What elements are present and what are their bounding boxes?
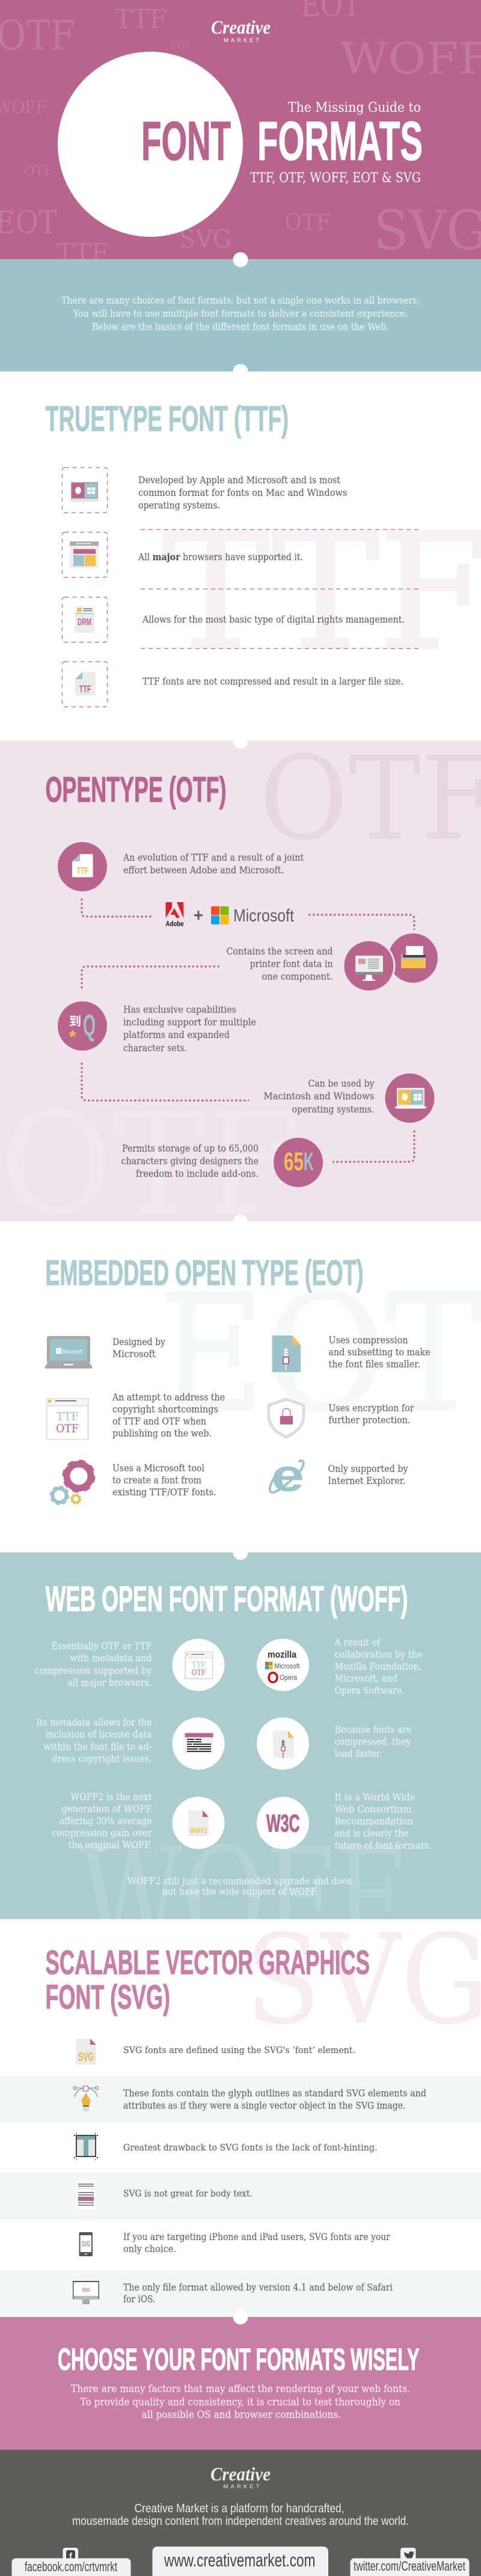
text: glyph outlines: These fonts contain the glyph outlines as standard SVG elements and bbox=[123, 2088, 426, 2099]
background format words: TTF bbox=[57, 238, 109, 269]
panel: introduction bbox=[0, 252, 481, 379]
icon: mozilla Microsoft Opera logos circle: Microsoft bbox=[274, 1662, 300, 1670]
text: essentially OTF or TTF bbox=[35, 1641, 152, 1688]
text: collaboration: Mozilla Foundation, bbox=[334, 1661, 422, 1672]
text: Safari for iOS bbox=[123, 2282, 393, 2304]
text: exclusive capabilities: character sets. bbox=[123, 1043, 187, 1054]
text: Microsoft tool: existing TTF/OTF fonts. bbox=[112, 1487, 216, 1498]
icon box: TTF file bbox=[63, 662, 107, 707]
text: closing advice: There are many factors that may affect the rendering of your web fonts. bbox=[71, 2383, 410, 2395]
title: The Missing Guide to bbox=[288, 100, 421, 115]
text: metadata license: Its metadata allows for the bbox=[36, 1717, 152, 1728]
icon box: TTF file: TTF bbox=[79, 683, 91, 695]
text: WOFF2 upgrade note: not have the wide support of WOFF. bbox=[162, 1886, 318, 1897]
heading: OPENTYPE (OTF) bbox=[46, 770, 226, 810]
text: screen and printer bbox=[226, 946, 333, 982]
website button bbox=[153, 2547, 328, 2576]
text: compression bbox=[328, 1335, 430, 1370]
text: screen and printer: Contains the screen and bbox=[226, 946, 333, 957]
row stripes bbox=[0, 2076, 481, 2317]
icon: character sets circle: Q bbox=[83, 1009, 96, 1042]
text: evolution of TTF: effort between Adobe and Microsoft. bbox=[123, 865, 284, 876]
panel: Embedded Open Type bbox=[44, 1253, 481, 1504]
icon: phone: SVG bbox=[82, 2239, 90, 2248]
text: copyright shortcomings: An attempt to address the bbox=[112, 1392, 225, 1403]
text: Internet Explorer bbox=[328, 1463, 408, 1486]
logo: Creative Market: MARKET bbox=[224, 2483, 260, 2490]
text: exclusive capabilities bbox=[123, 1004, 256, 1054]
icon box: operating systems bbox=[63, 468, 107, 513]
text: designed by Microsoft: Microsoft bbox=[112, 1349, 156, 1360]
text: Microsoft tool: Uses a Microsoft tool bbox=[112, 1463, 204, 1474]
text: Macintosh and Windows: Macintosh and Windows bbox=[263, 1091, 375, 1102]
icon: TTF file circle: TTF bbox=[77, 866, 89, 876]
title: FONT bbox=[141, 111, 231, 172]
text: company description bbox=[72, 2502, 409, 2528]
panel: Web Open Font Format bbox=[0, 1552, 481, 1919]
text: iPhone and iPad bbox=[123, 2232, 391, 2254]
text: compression: the font files smaller. bbox=[328, 1359, 420, 1370]
logos: Adobe plus Microsoft: + bbox=[194, 906, 203, 926]
panel: Scalable Vector Graphics font bbox=[0, 1909, 481, 2317]
icon: 65K circle bbox=[274, 1138, 323, 1187]
text: screen and printer: printer font data in bbox=[250, 959, 333, 969]
background format words: SVG bbox=[179, 225, 231, 254]
text: font element: SVG fonts are defined using the SVG's ‘font’ element. bbox=[123, 2045, 355, 2056]
text: compression: Uses compression bbox=[328, 1335, 408, 1346]
icon: desktop bbox=[73, 2281, 99, 2304]
icon: Microsoft laptop: Microsoft bbox=[63, 1349, 82, 1355]
text: metadata license: within the font file to ad- bbox=[43, 1742, 152, 1753]
text: WOFF2 generation: generation of WOFF bbox=[61, 1804, 152, 1814]
icon: TTF file circle bbox=[58, 842, 107, 891]
text: company description: mousemade design content from independent creatives around the world. bbox=[72, 2515, 409, 2528]
text: Internet Explorer: Only supported by bbox=[328, 1463, 408, 1474]
intro text: There are many choices of font formats, but not a single one works in all browsers. bbox=[61, 295, 420, 306]
text: W3C recommendation bbox=[334, 1792, 432, 1851]
text: collaboration bbox=[334, 1637, 422, 1696]
icon: character sets circle bbox=[58, 1001, 107, 1051]
icon: W3C circle: W3C bbox=[266, 1809, 299, 1837]
icon: character sets circle: 到 bbox=[69, 1012, 81, 1029]
text: font hinting: Greatest drawback to SVG fonts is the lack of font-hinting. bbox=[123, 2142, 378, 2153]
row text: DRM: Allows for the most basic type of digital rights management. bbox=[142, 614, 405, 625]
background format words: OTF bbox=[24, 163, 53, 179]
panel: OpenType font bbox=[0, 732, 481, 1246]
icon: laptop circle bbox=[385, 1073, 434, 1123]
logo: Creative Market: Creative bbox=[211, 16, 271, 38]
text: body text: SVG is not great for body text. bbox=[123, 2188, 253, 2199]
text: collaboration: collaboration by the bbox=[334, 1649, 422, 1660]
text: WOFF2 generation: the original WOFF. bbox=[69, 1840, 152, 1851]
icon: metadata browser circle bbox=[172, 1718, 225, 1769]
row text: developed by bbox=[138, 475, 348, 511]
text: WOFF2 generation: compression gain over bbox=[52, 1828, 152, 1839]
icon box: browser bbox=[63, 533, 107, 577]
text: encryption: further protection. bbox=[328, 1415, 410, 1426]
icon: 65K circle: 65 bbox=[284, 1147, 304, 1176]
text: designed by Microsoft bbox=[112, 1337, 165, 1360]
icon: letter T with anchor points bbox=[74, 2133, 98, 2160]
text: Macintosh and Windows: operating systems. bbox=[292, 1104, 374, 1115]
panel: header bbox=[0, 0, 481, 269]
website button: www.creativemarket.com bbox=[164, 2550, 315, 2571]
icon: TTF OTF window circle: OTF bbox=[191, 1668, 206, 1677]
icon: pen tool bbox=[73, 2086, 99, 2111]
text: screen and printer: one component. bbox=[262, 971, 333, 982]
facebook button: facebook.com/crtvmrkt bbox=[25, 2559, 117, 2574]
background format words: WOFF bbox=[340, 34, 481, 84]
logo: Creative Market: MARKET bbox=[224, 37, 259, 44]
icon: Internet Explorer: e bbox=[271, 1450, 304, 1501]
text: Safari for iOS: for iOS. bbox=[123, 2294, 155, 2304]
row text: file size: TTF fonts are not compressed and result in a larger file size. bbox=[142, 676, 403, 687]
text: copyright shortcomings: of TTF and OTF when bbox=[112, 1416, 206, 1427]
icon: character sets circle: * bbox=[69, 1027, 76, 1047]
text: WOFF2 upgrade note: WOFF2 still just a recommended upgrade and does bbox=[127, 1876, 352, 1887]
icon: body text page bbox=[76, 2181, 96, 2209]
icon: TTF OTF window circle bbox=[172, 1638, 225, 1691]
row text: browsers: All major browsers have supported it. bbox=[138, 551, 303, 563]
text: load faster: Because fonts are bbox=[334, 1724, 411, 1735]
title bbox=[141, 100, 423, 186]
text: Microsoft tool: to create a font from bbox=[112, 1475, 201, 1486]
heading bbox=[46, 1944, 370, 2016]
icon: desktop: SVG bbox=[82, 2287, 90, 2293]
text: WOFF2 generation bbox=[52, 1792, 152, 1851]
icon: SVG file: SVG bbox=[78, 2051, 94, 2064]
icon: mozilla Microsoft Opera logos circle bbox=[257, 1638, 309, 1691]
text: 65,000 characters: characters giving designers the bbox=[121, 1156, 259, 1167]
icon: WOFF2 file circle bbox=[172, 1797, 225, 1849]
icon: TTF OTF window: TTF bbox=[57, 1410, 79, 1423]
text: evolution of TTF: An evolution of TTF and a result of a joint bbox=[123, 852, 304, 863]
icon: Microsoft laptop bbox=[44, 1336, 93, 1369]
background format words bbox=[0, 0, 481, 269]
heading: FONT (SVG) bbox=[46, 1978, 170, 2016]
text: closing advice: all possible OS and browser combinations. bbox=[142, 2409, 341, 2421]
icon: SVG file bbox=[76, 2039, 96, 2065]
facebook button bbox=[12, 2548, 131, 2576]
text: 65,000 characters: Permits storage of up to 65,000 bbox=[122, 1143, 259, 1154]
connector arrows bbox=[82, 899, 414, 1162]
text: W3C recommendation: future of font formats. bbox=[334, 1840, 432, 1851]
icon: gears bbox=[51, 1461, 94, 1504]
text: Microsoft tool bbox=[112, 1463, 216, 1498]
icon: TTF OTF window bbox=[46, 1398, 89, 1440]
text: glyph outlines: attributes as if they were a single vector object in the SVG image. bbox=[123, 2100, 405, 2111]
text: W3C recommendation: It is a World Wide bbox=[334, 1792, 415, 1803]
icon: mozilla Microsoft Opera logos circle: mozilla bbox=[268, 1650, 296, 1660]
logo: Creative Market: Creative bbox=[210, 2463, 271, 2485]
text: Macintosh and Windows bbox=[263, 1078, 375, 1115]
background format words: SVG bbox=[170, 39, 189, 52]
text: iPhone and iPad: only choice. bbox=[123, 2244, 176, 2254]
icon box: DRM document: DRM bbox=[78, 617, 91, 627]
row text: developed by: Developed by Apple and Microsoft and is most bbox=[138, 475, 341, 486]
heading: TRUETYPE FONT (TTF) bbox=[46, 399, 289, 439]
text: collaboration: Opera Software. bbox=[334, 1685, 404, 1696]
text: essentially OTF or TTF: all major browsers. bbox=[67, 1677, 152, 1688]
icon: TTF OTF window: OTF bbox=[56, 1422, 79, 1435]
intro text: You will have to use multiple font formats to deliver a consistent experience. bbox=[73, 308, 408, 319]
logos: Adobe plus Microsoft: Adobe bbox=[166, 920, 184, 928]
text: copyright shortcomings bbox=[112, 1392, 225, 1439]
text: exclusive capabilities: including support for multiple bbox=[123, 1017, 256, 1028]
text: essentially OTF or TTF: compression supported by bbox=[35, 1665, 152, 1676]
text: iPhone and iPad: If you are targeting iPhone and iPad users, SVG fonts are your bbox=[123, 2232, 391, 2242]
text: closing advice bbox=[71, 2383, 410, 2421]
text: closing advice: To provide quality and consistency, it is crucial to test thoroughly on bbox=[81, 2396, 400, 2408]
icon: W3C circle bbox=[257, 1797, 309, 1849]
text: Safari for iOS: The only file format allowed by version 4.1 and below of Safari bbox=[123, 2282, 393, 2293]
text: exclusive capabilities: Has exclusive capabilities bbox=[123, 1004, 236, 1015]
row text: developed by: operating systems. bbox=[138, 500, 220, 511]
icon: phone bbox=[79, 2232, 93, 2256]
icon: shield with lock bbox=[269, 1399, 304, 1437]
row text: developed by: common format for fonts on Mac and Windows bbox=[138, 487, 348, 498]
text: load faster: compressed, they bbox=[334, 1736, 411, 1747]
icon: zipped file bbox=[272, 1335, 301, 1372]
logos: Adobe plus Microsoft bbox=[166, 902, 294, 928]
text: WOFF2 generation: offering 30% average bbox=[60, 1816, 152, 1827]
text: W3C recommendation: Web Consortium bbox=[334, 1804, 412, 1815]
text: W3C recommendation: Recommendation bbox=[334, 1816, 414, 1827]
text: copyright shortcomings: publishing on the web. bbox=[112, 1428, 212, 1439]
panel: TrueType font bbox=[46, 399, 481, 707]
text: essentially OTF or TTF: with metadata and bbox=[70, 1653, 152, 1664]
background word TTF: TTF bbox=[162, 499, 481, 686]
icon: mozilla Microsoft Opera logos circle: Opera bbox=[280, 1673, 297, 1682]
text: metadata license bbox=[36, 1717, 152, 1765]
text: company description: Creative Market is a platform for handcrafted, bbox=[135, 2502, 344, 2515]
facebook button: f bbox=[69, 2551, 73, 2562]
text: evolution of TTF bbox=[123, 852, 304, 876]
text: WOFF2 generation: WOFF2 is the next bbox=[71, 1792, 152, 1802]
icon: printer circle bbox=[388, 933, 438, 983]
icon: WOFF2 file circle: WOFF2 bbox=[190, 1827, 207, 1835]
text: W3C recommendation: and is clearly the bbox=[334, 1828, 409, 1839]
text: collaboration: A result of bbox=[334, 1637, 381, 1648]
intro text: Below are the basics of the different font formats in use on the Web. bbox=[92, 322, 389, 332]
background format words: OTF bbox=[284, 210, 331, 235]
text: Internet Explorer: Internet Explorer. bbox=[328, 1476, 405, 1486]
icon: TTF OTF window circle: TTF bbox=[192, 1661, 206, 1670]
text: 65,000 characters: freedom to include add-ons. bbox=[136, 1168, 259, 1179]
white title circle bbox=[58, 52, 243, 237]
text: compression: and subsetting to make bbox=[328, 1347, 430, 1358]
text: 65,000 characters bbox=[121, 1143, 259, 1179]
text: designed by Microsoft: Designed by bbox=[112, 1337, 165, 1348]
background format words: TTF bbox=[115, 4, 167, 35]
icon box: DRM document bbox=[63, 597, 107, 642]
logos: Adobe plus Microsoft: Microsoft bbox=[233, 906, 294, 926]
icon: monitor circle bbox=[343, 940, 394, 992]
text: encryption: Uses encryption for bbox=[328, 1403, 414, 1414]
title: TTF, OTF, WOFF, EOT & SVG bbox=[250, 171, 421, 186]
panel: choose wisely bbox=[0, 2309, 481, 2450]
text: load faster: load faster. bbox=[334, 1748, 382, 1759]
text: copyright shortcomings: copyright shortcomings bbox=[112, 1404, 218, 1415]
dividers bbox=[141, 530, 420, 649]
text: exclusive capabilities: platforms and expanded bbox=[123, 1030, 230, 1040]
text: collaboration: Microsoft, and bbox=[334, 1673, 398, 1684]
text: encryption bbox=[328, 1403, 414, 1426]
icon: zipped file circle bbox=[257, 1718, 309, 1769]
text: glyph outlines bbox=[123, 2088, 426, 2111]
text: Macintosh and Windows: Can be used by bbox=[308, 1078, 375, 1089]
intro text bbox=[61, 295, 420, 332]
text: WOFF2 upgrade note bbox=[127, 1876, 352, 1897]
icon: 65K circle: K bbox=[304, 1147, 314, 1176]
text: load faster bbox=[334, 1724, 411, 1759]
background word OTF bottom: OTF bbox=[0, 1083, 301, 1246]
text: essentially OTF or TTF: Essentially OTF or TTF bbox=[52, 1641, 152, 1652]
panel: footer bbox=[0, 2450, 481, 2576]
twitter button bbox=[350, 2548, 469, 2576]
text: metadata license: inclusion of license data bbox=[46, 1729, 152, 1740]
text: metadata license: dress copyright issues. bbox=[52, 1754, 152, 1765]
